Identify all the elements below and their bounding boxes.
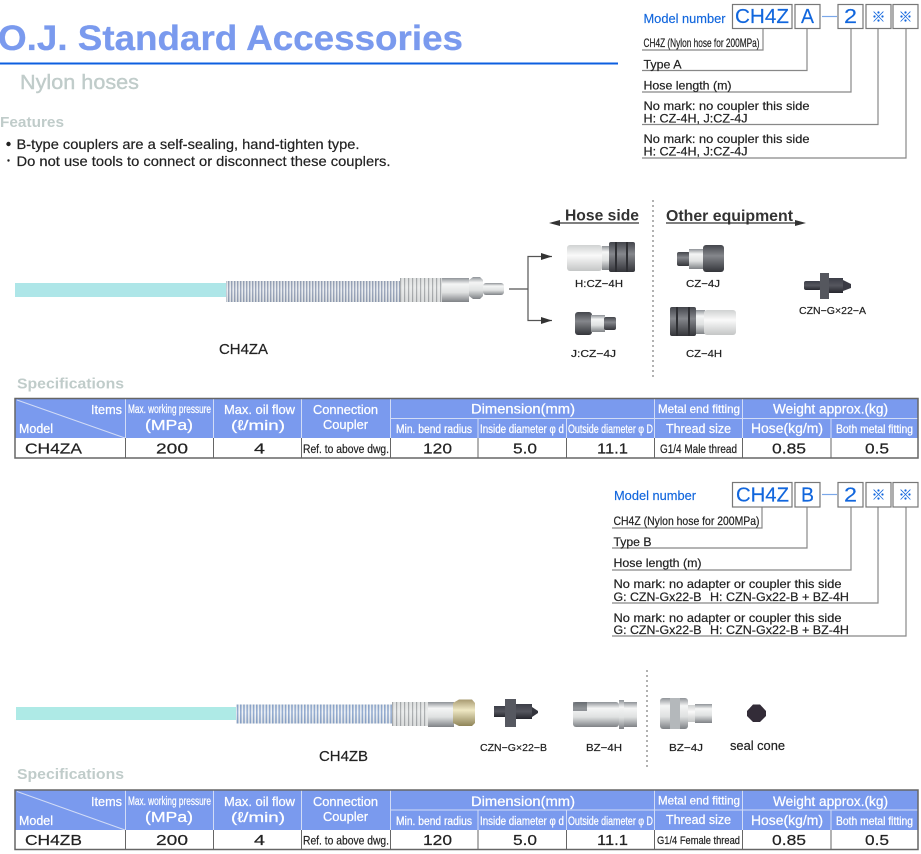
header labels B: Hose(kg/m) [751,813,823,828]
label H:CZ-4H: H:CZ−4H [575,278,623,290]
label BZ-4J: BZ−4J [669,742,703,754]
row values B: 0.5 [865,832,889,849]
part CZ-4J [677,245,724,272]
row values B: 5.0 [513,832,537,849]
header labels A: Outside diameter φ D [568,424,653,436]
specifications table A [15,398,918,458]
key descriptions B: G: CZN-Gx22-B [614,623,702,637]
header labels B: Metal end fitting [658,794,740,808]
header labels B: Max. working pressure [128,796,211,808]
header labels A: (ℓ/min) [231,417,285,433]
part J:CZ-4J [575,312,616,335]
row values A: Ref. to above dwg. [303,444,389,456]
key descriptions B: CH4Z (Nylon hose for 200MPa) [614,514,760,528]
label CH4ZA: CH4ZA [219,342,268,358]
code boxes A [732,4,918,28]
row values A: G1/4 Male thread [660,444,737,456]
row values A: 200 [156,440,188,458]
divider B [646,670,648,770]
key descriptions A [644,36,810,158]
header labels A: Connection [313,402,378,417]
part CZ-4H [670,307,736,336]
header labels A: Thread size [666,421,731,436]
row values A: CH4ZA [25,440,82,458]
header labels A: Dimension(mm) [471,402,575,416]
key descriptions B: No mark: no adapter or coupler this side [614,611,842,625]
header labels B: Connection [313,794,378,809]
hose side heading: Hose side [565,208,639,224]
row values B: 4 [254,832,265,849]
code boxes B: ※ [872,487,886,503]
row values B: 11.1 [597,832,628,849]
specifications heading B: Specifications [17,766,124,783]
key descriptions A: H: CZ-4H, J:CZ-4J [644,144,748,158]
part CZN-Gx22-A [804,273,851,299]
header labels B: Outside diameter φ D [568,816,653,828]
header labels B: Inside diameter φ d [480,816,564,828]
model number key B [612,482,918,637]
header labels A: Max. oil flow [224,402,296,417]
seal cone part [747,704,766,722]
row values B: CH4ZB [25,832,82,849]
code boxes B: B [801,484,814,506]
header labels A: Coupler [323,417,369,432]
header labels B: Thread size [666,812,731,827]
row values A: 4 [254,440,265,458]
label CZ-4J: CZ−4J [686,278,720,290]
part BZ-4H [573,700,637,729]
header labels A [19,402,913,436]
part H:CZ-4H [567,242,635,272]
key descriptions B: No mark: no adapter or coupler this side [614,577,842,591]
part CZN-Gx22-B [494,699,538,727]
header labels A: (MPa) [145,417,193,434]
header labels A: Hose(kg/m) [751,421,823,436]
seal cone label: seal cone [730,739,785,753]
row values B: 120 [423,832,452,849]
header labels A: Inside diameter φ d [480,424,564,436]
feature bullet 1: B-type couplers are a self-sealing, hand-tighten type. [16,136,360,152]
model number label B: Model number [614,488,697,503]
specifications heading A: Specifications [17,376,124,392]
key descriptions A: H: CZ-4H, J:CZ-4J [644,112,748,126]
label CZ-4H: CZ−4H [686,348,722,360]
specifications table B [15,790,918,850]
header labels B: (MPa) [145,809,193,826]
features block [0,115,390,169]
code boxes B [732,482,918,507]
table header A [15,399,918,438]
header labels B [19,794,913,828]
key descriptions B [614,514,849,637]
code boxes A: CH4Z [735,6,789,28]
header labels A: Weight approx.(kg) [773,402,888,416]
header labels A: Min. bend radius [396,424,472,436]
header labels B: Weight approx.(kg) [773,794,888,809]
key descriptions A: No mark: no coupler this side [644,132,810,146]
row values A [25,440,889,458]
row values B: Ref. to above dwg. [303,836,389,848]
row values A: 11.1 [597,440,628,458]
label CZN-Gx22-B: CZN−G×22−B [480,742,547,754]
key descriptions A: CH4Z (Nylon hose for 200MPa) [644,36,760,50]
header labels B: Coupler [323,809,369,824]
header labels B: Dimension(mm) [471,794,575,809]
row values A: 120 [423,440,452,458]
label J:CZ-4J: J:CZ−4J [571,348,616,360]
divider A [652,200,654,377]
key descriptions B: Hose length (m) [614,556,702,570]
other equipment heading: Other equipment [666,208,794,225]
branch arrows [509,253,552,324]
table header B [15,790,918,830]
header labels B: Items [91,794,122,809]
hose CH4ZB [16,700,475,727]
feature bullet 2: Do not use tools to connect or disconnect these couplers. [16,153,390,169]
row values A: 0.5 [865,440,889,458]
key descriptions B: Type B [614,535,652,549]
header labels B: Model [19,813,53,828]
key descriptions B: H: CZN-Gx22-B + BZ-4H [710,590,849,604]
header labels B: Max. oil flow [224,794,296,809]
code boxes A: A [801,6,815,28]
subtitle: Nylon hoses [20,72,139,94]
code boxes B: ※ [898,487,912,503]
header labels B: (ℓ/min) [231,809,285,825]
part BZ-4J [660,698,712,729]
row values B: G1/4 Female thread [657,835,740,847]
key descriptions B: G: CZN-Gx22-B [614,590,702,604]
header labels B: Min. bend radius [396,816,472,828]
key descriptions A: No mark: no coupler this side [644,99,810,113]
header labels A: Model [19,421,53,436]
key descriptions B: H: CZN-Gx22-B + BZ-4H [710,623,849,637]
code boxes B: 2 [844,484,857,506]
row values A: 5.0 [513,440,537,458]
label CZN-Gx22-A: CZN−G×22−A [799,305,866,317]
code boxes A: 2 [844,6,857,28]
features heading: Features [0,115,64,131]
code boxes B: CH4Z [736,484,789,506]
model number label A: Model number [644,11,726,26]
leader lines B [612,507,906,636]
model number key A [642,4,918,158]
code boxes A: ※ [872,9,886,25]
key descriptions A: Type A [644,58,682,72]
code boxes A: ※ [898,9,912,25]
key descriptions A: Hose length (m) [644,78,732,92]
title: O.J. Standard Accessories [0,19,463,58]
header labels A: Max. working pressure [128,404,211,416]
row values B: 200 [156,832,188,849]
row values A: 0.85 [772,440,806,458]
table row A [15,438,918,458]
header labels A: Metal end fitting [658,402,740,416]
leader lines A [642,28,906,158]
table row B [15,830,918,850]
row values B: 0.85 [772,832,806,849]
title rule [0,62,618,64]
row values B [25,832,889,849]
header labels A: Items [91,402,122,417]
label CH4ZB: CH4ZB [319,748,368,765]
hose CH4ZA [15,277,504,302]
label BZ-4H: BZ−4H [586,742,622,754]
